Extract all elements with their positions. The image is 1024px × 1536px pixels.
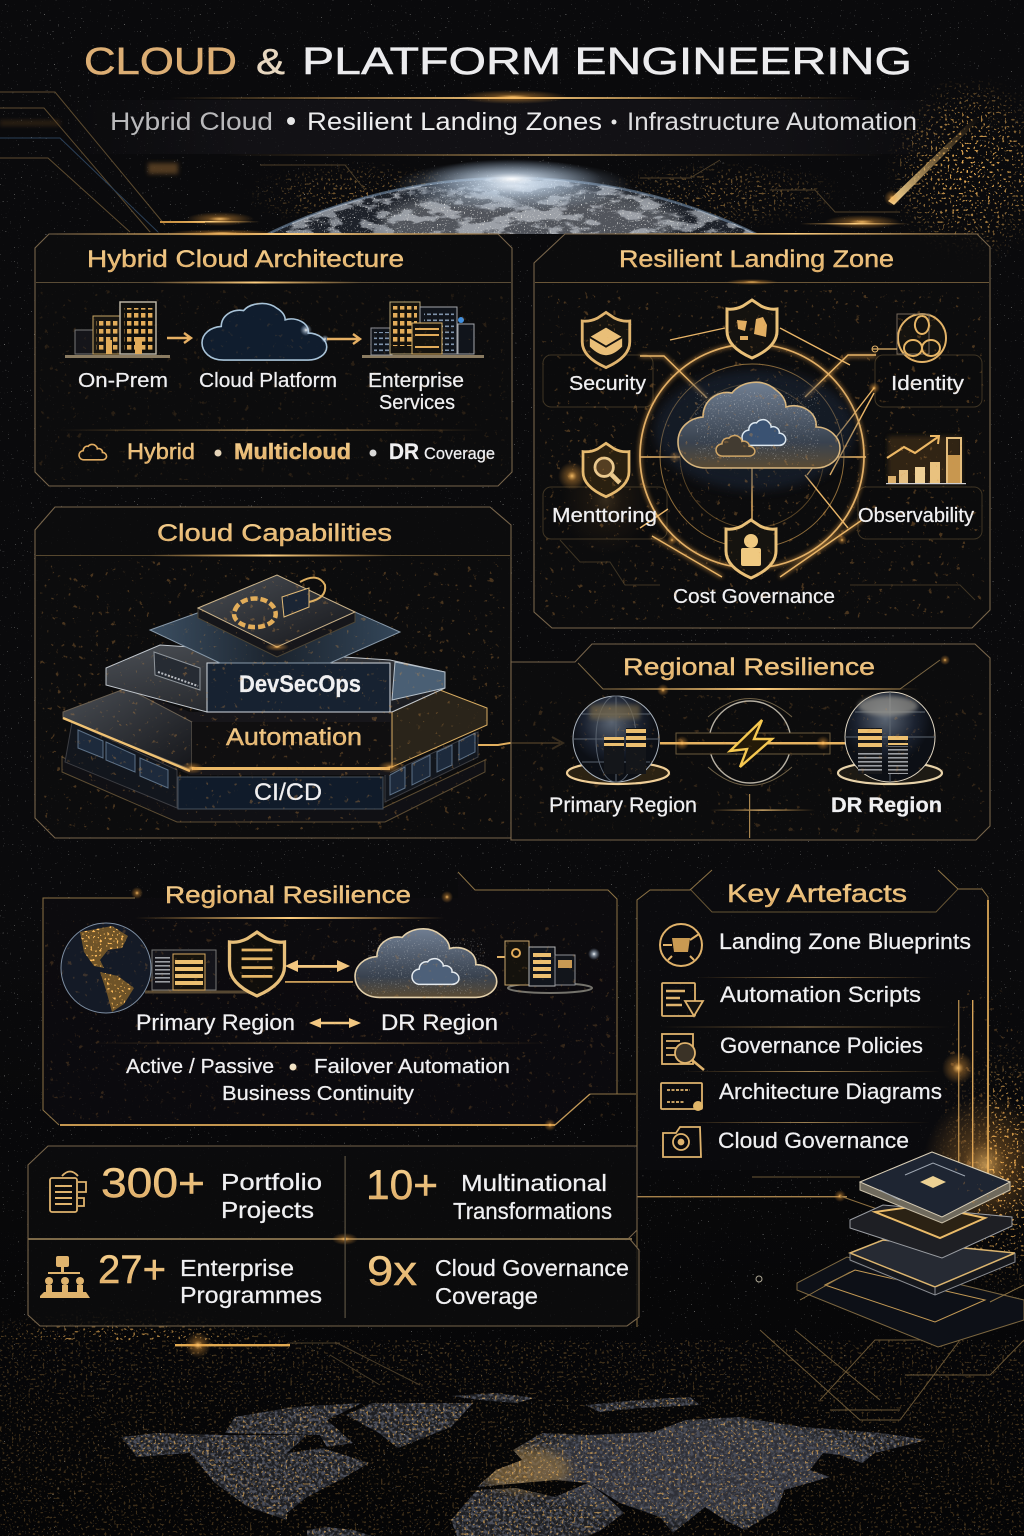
heading rule [36,554,510,556]
icon: DR cloud [355,929,497,997]
stat: 10+ multinational transformations: Transformations [453,1198,612,1224]
subtitle band [60,100,960,154]
title [84,41,912,83]
stat: 300+ portfolio projects: Portfolio [221,1169,322,1195]
row rule [58,430,483,431]
heading: Key Artefacts [727,880,907,908]
arrow: capabilities to regional [478,737,563,749]
modes text: Business Continuity [222,1083,414,1105]
label: DevSecOps: DevSecOps [239,671,361,698]
stat: 300+ portfolio projects [50,1159,322,1223]
stat: 10+ multinational transformations: 10+ [366,1161,438,1208]
icon: on-prem buildings [65,302,170,358]
heading tab [690,889,958,912]
top plate [198,575,355,657]
panel: regional resilience (bottom) [43,872,636,1131]
left circuit traces [0,92,900,232]
artefact: cloud governance [663,1127,909,1157]
panel: hybrid cloud architecture [35,230,520,486]
labels: landing zone [552,373,974,608]
stat: 27+ enterprise programmes: Programmes [180,1282,322,1308]
label: CI/CD: CI/CD [254,779,322,806]
hub ring diagram [558,328,880,577]
tier: DevSecOps [106,645,445,712]
panel: metrics [28,1146,639,1326]
stat: 9x cloud governance coverage [367,1247,629,1309]
icon: cost governance shield [726,520,776,578]
lower plate [850,1240,1015,1295]
labels: hybrid flow: Enterprise [368,370,464,392]
world map [110,1385,940,1536]
icon: earth globe [60,923,152,1013]
subtitle: Infrastructure Automation [627,108,917,136]
rule [695,977,935,978]
icon: DR servers [497,941,600,993]
heading: Regional Resilience [165,882,411,909]
modes text: Active / Passive [126,1056,274,1078]
stat: 27+ enterprise programmes: Enterprise [180,1255,294,1281]
artefact: architecture diagrams [661,1079,942,1111]
middle plate [850,1205,1012,1258]
panel dust overlay [38,290,1024,1220]
heading: Regional Resilience [623,654,875,681]
artefact: cloud governance: Cloud Governance [718,1128,909,1153]
arrow: on-prem to cloud [167,333,191,343]
heading rule [135,917,445,919]
artefact: governance policies [662,1033,923,1070]
artefact: landing zone blueprints: Landing Zone Blueprints [719,929,971,954]
planet [267,162,758,234]
amber smudge top left [0,120,178,174]
labels: hybrid flow: Services [379,392,455,414]
rule [680,1122,930,1123]
top plate [860,1152,1010,1223]
tags: hybrid, multicloud, DR coverage: Hybrid [127,439,195,464]
rule [680,1071,940,1072]
heading rule [600,655,950,696]
stat: 9x cloud governance coverage: 9x [367,1247,417,1294]
tags: hybrid, multicloud, DR coverage [127,439,495,464]
labels: hybrid flow: On-Prem [78,370,168,392]
panel: cloud capabilities [35,507,511,838]
stat: 10+ multinational transformations: Multinational [461,1170,607,1196]
arrow: cloud to enterprise [327,334,360,344]
heading stars [131,887,453,903]
heading rule [36,282,511,284]
artefact: architecture diagrams: Architecture Diagrams [719,1079,942,1104]
icon: security shield [582,312,630,368]
tier: automation [63,688,487,775]
stat: 9x cloud governance coverage: Cloud Governance [435,1255,629,1281]
heading rule [535,279,989,285]
circuit base [797,1257,1024,1347]
icon: enterprise services [362,302,484,358]
labels: regions: Primary Region [549,794,697,817]
stat: 10+ multinational transformations [366,1161,612,1224]
artefact: landing zone blueprints [660,924,971,966]
tags: hybrid, multicloud, DR coverage: Coverage [424,444,495,463]
labels: region flow: DR Region [381,1010,498,1035]
stat: 300+ portfolio projects: Projects [221,1197,314,1223]
label plates [543,355,982,600]
lower right circuit traces [760,1330,1024,1420]
rule [660,1026,950,1028]
labels: landing zone: Menttoring [552,505,657,527]
labels: region flow: Primary Region [136,1010,295,1035]
labels: landing zone: Observability [858,505,974,527]
icon: primary servers [145,950,248,992]
icon: identity [872,314,946,362]
title: PLATFORM ENGINEERING [302,41,912,83]
lower left comet [175,1332,420,1385]
isometric stack [62,575,487,822]
labels: hybrid flow: Cloud Platform [199,370,337,392]
subtitle [110,108,917,136]
panel: regional resilience (top) [511,644,990,840]
icon: primary region globe [567,696,669,784]
icon: region shield [230,932,284,996]
labels: landing zone: Identity [891,373,964,395]
tier: CI/CD [62,722,485,822]
stat: 27+ enterprise programmes [40,1248,322,1308]
icon: hub cloud [655,370,855,490]
icon: lightning bolt [730,720,772,767]
icon: devops gear and device [234,578,325,627]
subtitle: Resilient Landing Zones [307,108,602,136]
icon: monitoring shield [583,443,629,497]
artefact: governance policies: Governance Policies [720,1033,923,1058]
labels: regions: DR Region [831,794,942,817]
panel: key artefacts [637,870,988,1327]
label: automation: Automation [226,724,362,751]
labels: landing zone: Cost Governance [673,586,835,608]
arrow: replication [285,960,353,983]
title: & [256,41,285,82]
subtitle: Hybrid Cloud [110,108,273,136]
labels: landing zone: Security [569,373,646,395]
icon: layered chip stack [797,1152,1024,1347]
artefact: automation scripts [662,982,921,1016]
artefact: automation scripts: Automation Scripts [720,982,921,1007]
connector with failover bolt [660,698,850,786]
icon: cloud platform [202,303,329,360]
icon: compliance shield [727,300,777,358]
modes text [126,1056,510,1105]
heading: Hybrid Cloud Architecture [87,246,404,273]
stat: 9x cloud governance coverage: Coverage [435,1283,538,1309]
title: CLOUD [84,41,237,83]
heading: Cloud Capabilities [157,520,392,547]
glass plate [150,612,400,663]
subtitle lower divider [225,154,885,156]
stat: 300+ portfolio projects: 300+ [101,1159,205,1206]
heading: Resilient Landing Zone [619,246,894,273]
comet [884,117,979,206]
heading tab [578,660,940,689]
icon: observability chart [886,436,966,484]
labels: region flow [136,1010,498,1035]
modes text: Failover Automation [314,1056,510,1078]
rising gold traces [637,900,1024,1282]
panel: resilient landing zone [534,233,990,628]
planet top flare [422,159,602,199]
stat: 27+ enterprise programmes: 27+ [98,1248,166,1292]
glow nodes above panels [160,212,910,229]
tags: hybrid, multicloud, DR coverage: Multicloud [234,439,351,464]
rule [90,1042,550,1044]
title divider flare [170,90,860,104]
icon: DR region globe [838,692,942,784]
labels: regions [549,794,942,838]
icon: hybrid small cloud [79,444,107,460]
tags: hybrid, multicloud, DR coverage: DR [389,439,419,464]
labels: hybrid flow [78,370,464,414]
